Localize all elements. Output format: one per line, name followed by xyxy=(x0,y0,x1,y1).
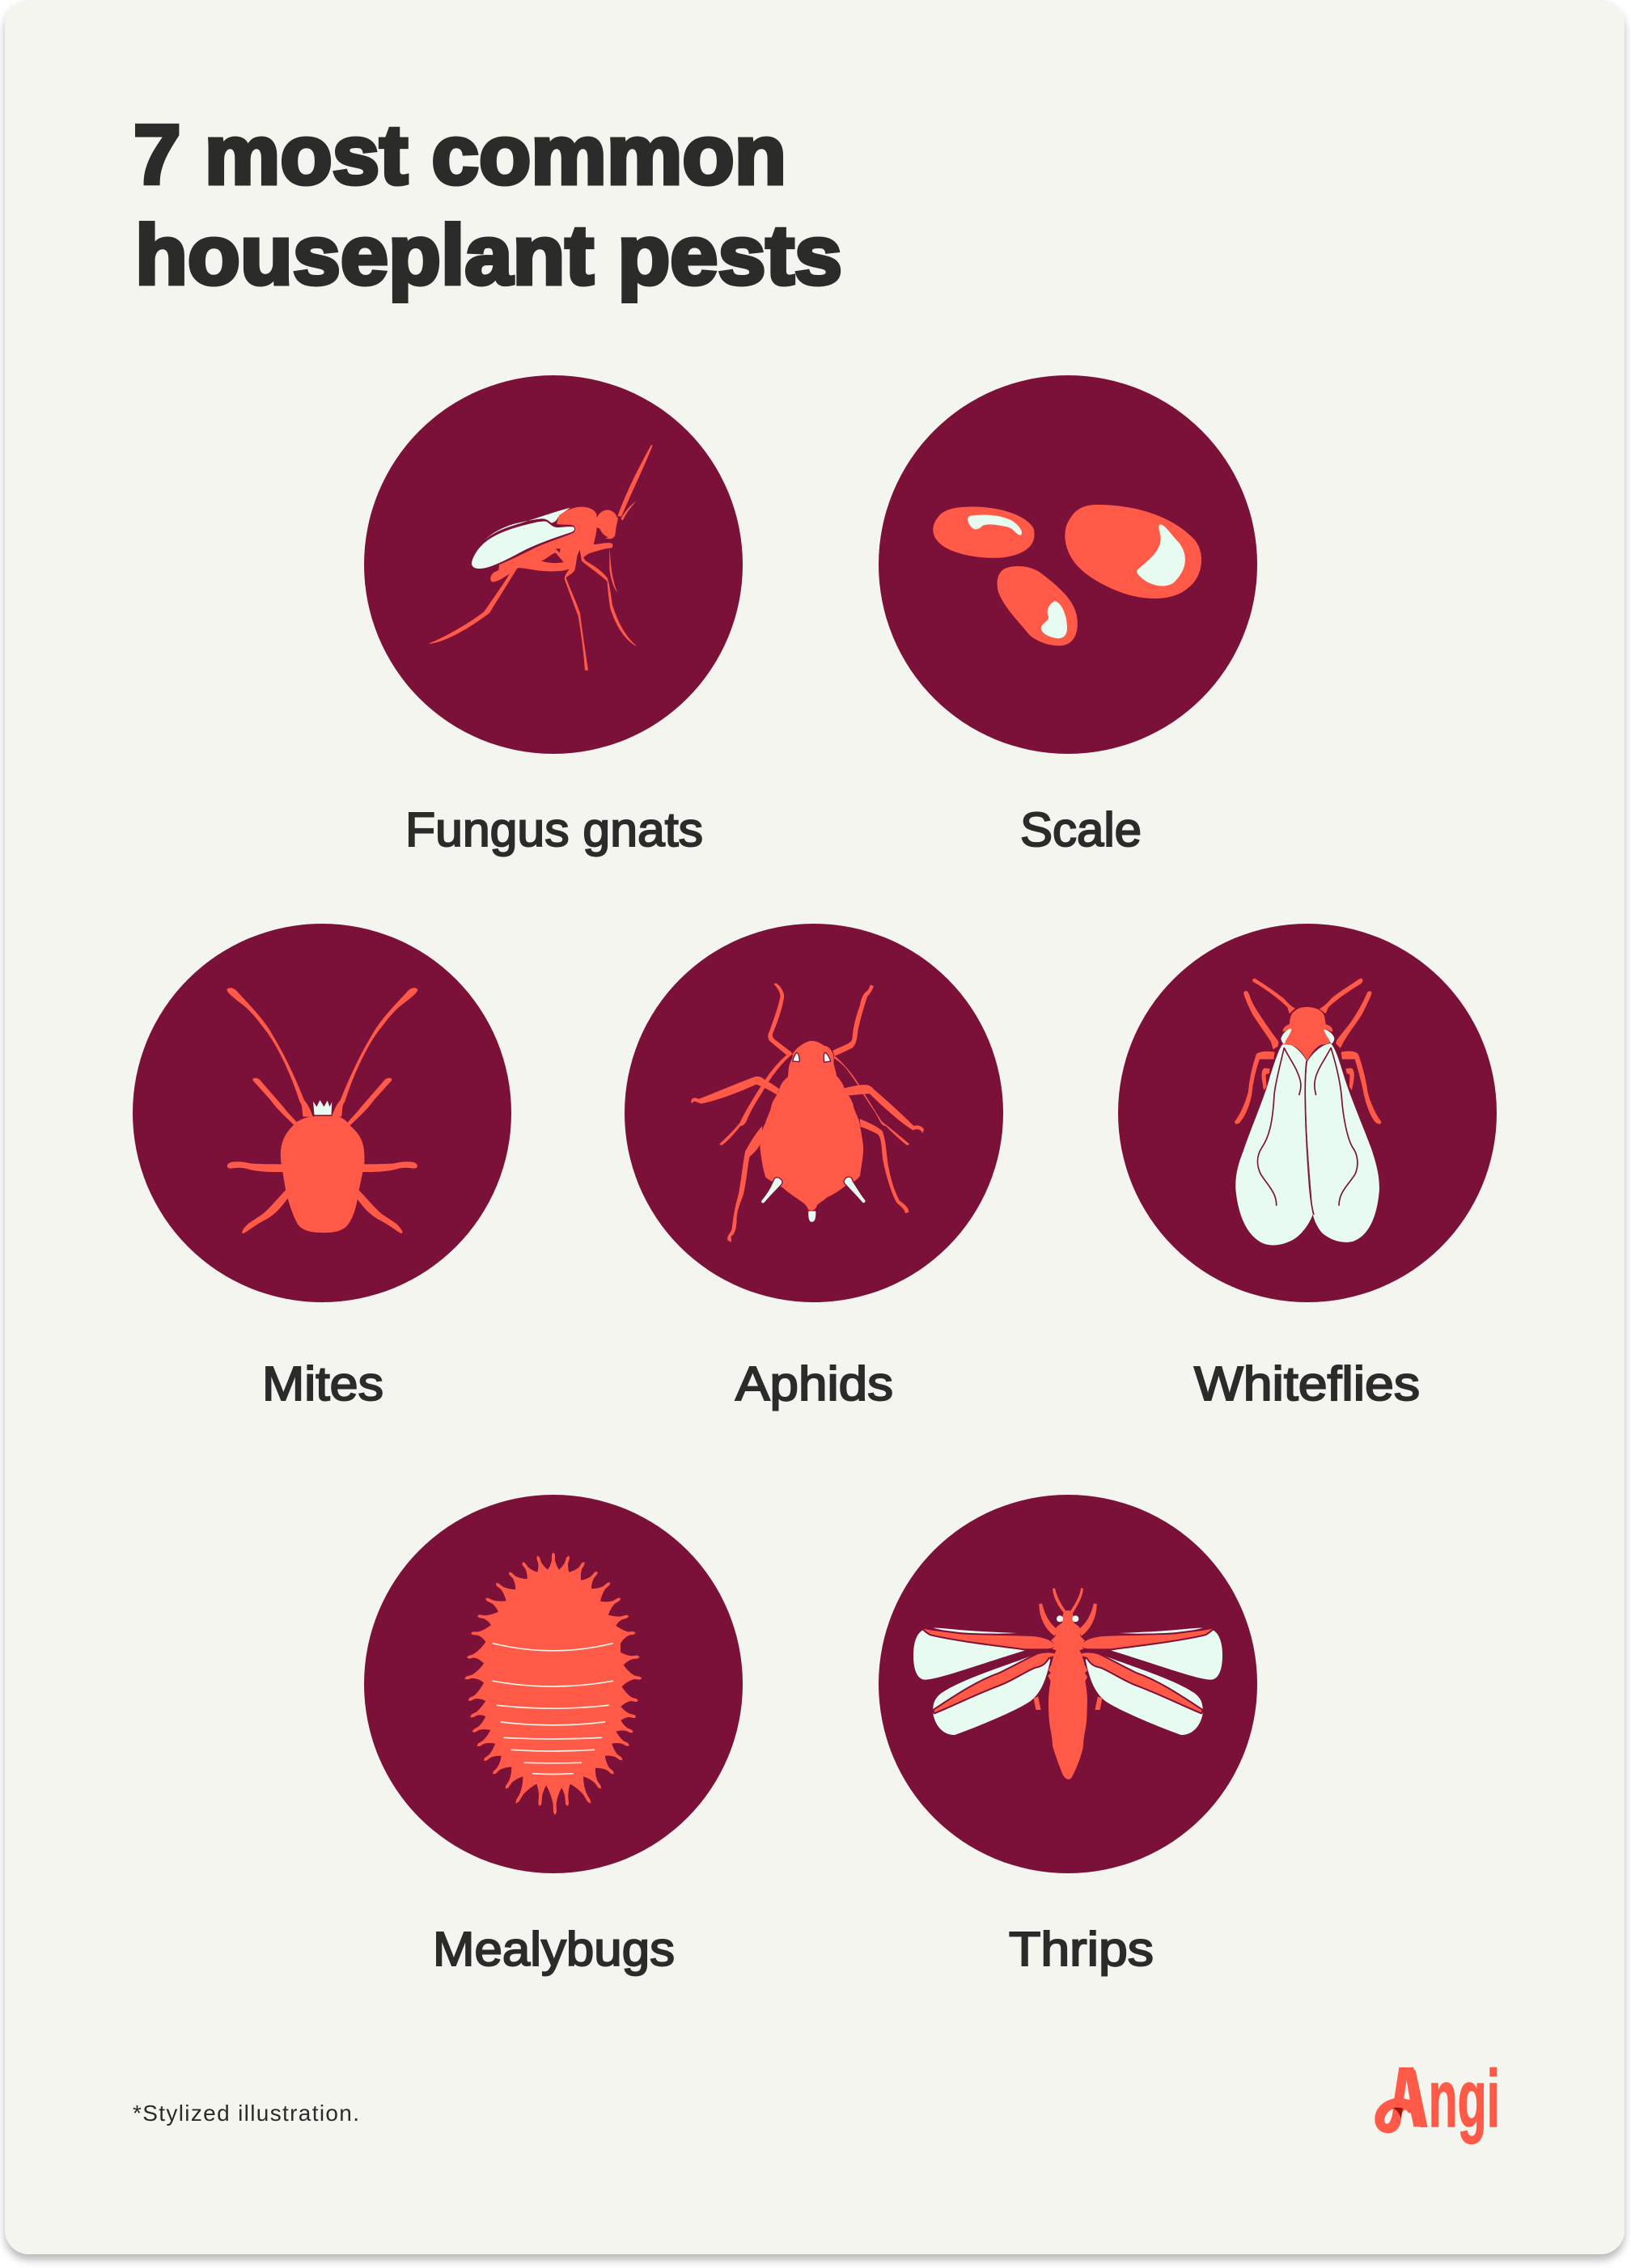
label: Mites: Mites xyxy=(262,1357,383,1411)
panel: aphids xyxy=(625,924,1003,1302)
title xyxy=(133,108,842,303)
panel: thrips xyxy=(879,1495,1257,1873)
icon: scale insects xyxy=(933,505,1201,645)
label: Scale: Scale xyxy=(1020,803,1142,857)
panel: mealybugs xyxy=(364,1495,743,1873)
body xyxy=(1034,1589,1102,1779)
label: Whiteflies: Whiteflies xyxy=(1194,1357,1420,1411)
icon: mite xyxy=(228,988,417,1233)
label: Thrips: Thrips xyxy=(1009,1923,1154,1976)
icon: fungus gnat xyxy=(430,445,653,670)
title: 7 most common xyxy=(133,108,786,202)
icon: aphid xyxy=(692,984,924,1242)
title: houseplant pests xyxy=(135,209,842,303)
logo: Angi: Angi xyxy=(1394,2054,1500,2144)
right wings xyxy=(1079,1627,1222,1735)
icon: whitefly xyxy=(1235,979,1381,1245)
panel: scale xyxy=(879,375,1257,754)
panel: mites xyxy=(133,924,511,1302)
logo: Angi xyxy=(1375,2054,1500,2144)
icon: mealybug xyxy=(466,1554,641,1813)
label: Aphids: Aphids xyxy=(735,1357,893,1411)
panel: fungus gnats xyxy=(364,375,743,754)
label: Mealybugs: Mealybugs xyxy=(433,1923,675,1976)
icon: thrips xyxy=(913,1589,1222,1779)
left wings xyxy=(913,1627,1057,1735)
panel: whiteflies xyxy=(1118,924,1497,1302)
eyes xyxy=(1057,1615,1078,1622)
footnote: *Stylized illustration. xyxy=(133,2101,359,2126)
label: Fungus gnats: Fungus gnats xyxy=(405,803,703,857)
